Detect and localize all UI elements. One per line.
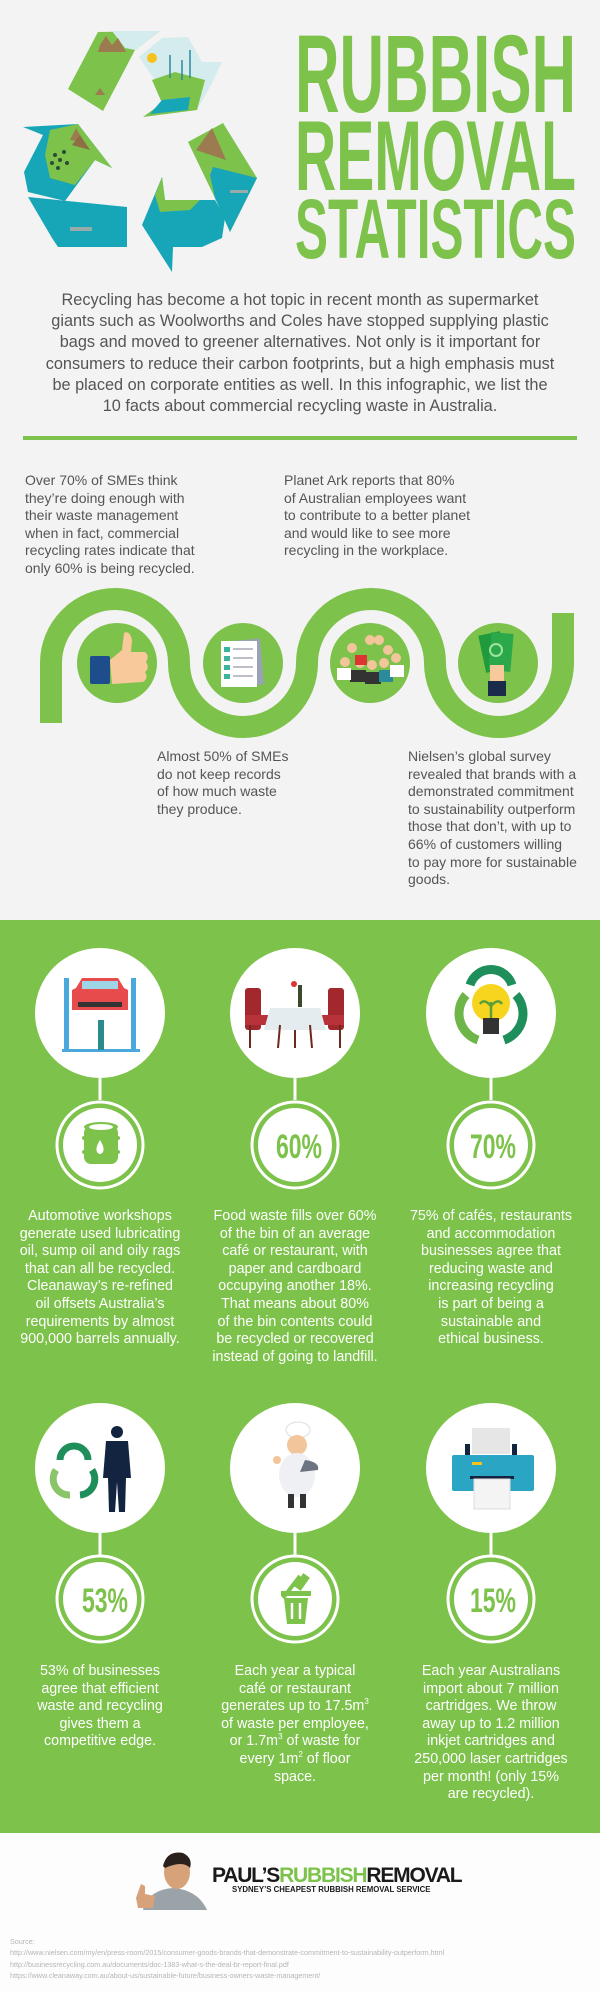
sources: Source: (10, 1937, 35, 1946)
fact: over 70% SMEs: recycling rates indicate that (25, 542, 195, 558)
piece 4: left bottom water band (28, 197, 127, 247)
text: 53% of businesses: agree that efficient (41, 1681, 159, 1697)
text: cartridges: per month! (only 15% (423, 1769, 559, 1785)
text: 53% of businesses (37, 1663, 163, 1749)
text: typical café waste: Each year a typical (235, 1663, 355, 1679)
fact: almost 50% SMEs: of how much waste (157, 783, 277, 799)
fact: Planet Ark: recycling in the workplace. (284, 542, 448, 558)
text: 75% of cafés: ethical business. (438, 1331, 544, 1347)
text: 75% of cafés: is part of being a (438, 1296, 544, 1312)
sources (10, 1937, 444, 1980)
text: automotive workshops: 900,000 barrels annually. (20, 1331, 180, 1347)
sources: http://www.nielsen.com/my/en/press-room/2015/consumer-goods-brands-that-demonstrate-commitment-to-sustainability-outperform.html (10, 1948, 444, 1957)
text: automotive workshops (20, 1208, 180, 1347)
logo: Paul's Rubbish Removal (136, 1852, 462, 1910)
icon: money in hand (458, 623, 538, 703)
fact: Nielsen survey: to pay more for sustainable (408, 854, 577, 870)
fact: over 70% SMEs: only 60% is being recycled. (25, 560, 195, 576)
text: 53% of businesses: competitive edge. (44, 1733, 156, 1749)
text: typical café waste: space. (274, 1769, 316, 1785)
fact: Nielsen survey: goods. (408, 871, 450, 887)
text: typical café waste: generates up to 17.5m3 (221, 1697, 369, 1714)
text: cartridges: Each year Australians (422, 1663, 560, 1679)
sources: http://businessrecycling.com.au/documents/doc-1383-what-s-the-deal-br-report-final.pdf (10, 1960, 289, 1969)
text: cartridges: 250,000 laser cartridges (414, 1751, 568, 1767)
text: food waste: be recycled or recovered (216, 1331, 374, 1347)
fact: Nielsen survey: demonstrated commitment (408, 783, 574, 799)
text: 75% of cafés: businesses agree that (421, 1243, 561, 1259)
stat: 60% and 70%: 70% (470, 1128, 516, 1166)
fact: Nielsen survey (408, 748, 577, 887)
fact: almost 50% SMEs: Almost 50% of SMEs (157, 748, 288, 764)
text: food waste: Food waste fills over 60% (214, 1208, 376, 1224)
text: food waste: café or restaurant, with (222, 1243, 368, 1259)
fact: Planet Ark: and would like to see more (284, 525, 451, 541)
text: cartridges: cartridges. We throw (426, 1698, 556, 1714)
fact: Nielsen survey: to sustainability outperform (408, 801, 575, 817)
fact: Nielsen survey: those that don’t, with up to (408, 818, 571, 834)
text: food waste: paper and cardboard (229, 1261, 361, 1277)
fact: Planet Ark (284, 472, 470, 558)
piece 1: top-left land (68, 31, 160, 111)
text: automotive workshops: Cleanaway’s re-refined (27, 1278, 173, 1294)
title (295, 13, 576, 270)
icon: group of people (330, 623, 410, 703)
piece 2: top-right sky arrow (139, 37, 222, 117)
text: cartridges: inkjet cartridges and (427, 1733, 555, 1749)
stat: 60% and 70%: 60% (276, 1128, 322, 1166)
text: 75% of cafés (410, 1208, 572, 1347)
text: 53% of businesses: gives them a (59, 1716, 141, 1732)
text: 53% of businesses: 53% of businesses (40, 1663, 160, 1679)
text: automotive workshops: that can all be recycled. (25, 1261, 175, 1277)
intro paragraph: be placed on corporate entities as well. In this infographic, we list the (52, 376, 548, 394)
text: cartridges (414, 1663, 568, 1802)
text: automotive workshops: oil offsets Australia’s (35, 1296, 164, 1312)
fact: almost 50% SMEs (157, 748, 288, 817)
text: 53% of businesses: waste and recycling (37, 1698, 163, 1714)
text: 75% of cafés: and accommodation (427, 1226, 555, 1242)
icon: man thumbs up (136, 1852, 207, 1910)
text: food waste: of the bin of an average (220, 1226, 370, 1242)
text: typical café waste (221, 1663, 369, 1785)
text: 75% of cafés: reducing waste and (429, 1261, 553, 1277)
text: food waste: occupying another 18%. (218, 1278, 372, 1294)
text: food waste: instead of going to landfill. (212, 1349, 378, 1365)
text: 75% of cafés: sustainable and (441, 1314, 541, 1330)
intro paragraph: 10 facts about commercial recycling waste in Australia. (103, 397, 497, 415)
intro paragraph: giants such as Woolworths and Coles have stopped supplying plastic (51, 312, 549, 330)
text: 75% of cafés: 75% of cafés, restaurants (410, 1208, 572, 1224)
fact: over 70% SMEs (25, 472, 195, 576)
text: automotive workshops: Automotive workshops (28, 1208, 172, 1224)
intro paragraph: Recycling has become a hot topic in recent month as supermarket (62, 291, 538, 309)
fact: Planet Ark: Planet Ark reports that 80% (284, 472, 454, 488)
fact: over 70% SMEs: when in fact, commercial (25, 525, 179, 541)
fact: almost 50% SMEs: do not keep records (157, 766, 281, 782)
text: 75% of cafés: increasing recycling (428, 1278, 554, 1294)
icon: checklist (203, 623, 283, 703)
tagline: SYDNEY’S CHEAPEST RUBBISH REMOVAL SERVICE (232, 1885, 430, 1894)
piece 3: left upper arrow (23, 124, 112, 201)
text: automotive workshops: generate used lubricating (20, 1226, 180, 1242)
fact: over 70% SMEs: Over 70% of SMEs think (25, 472, 178, 488)
icon: recycle symbol with landscapes (23, 31, 257, 272)
text: typical café waste: café or restaurant (239, 1681, 351, 1697)
text: typical café waste: or 1.7m3 of waste for (230, 1732, 360, 1749)
stat: 53%: 53% (82, 1582, 128, 1620)
fact: almost 50% SMEs: they produce. (157, 801, 242, 817)
fact: Planet Ark: of Australian employees want (284, 490, 466, 506)
text: typical café waste: every 1m2 of floor (240, 1750, 350, 1767)
text: cartridges: are recycled). (448, 1786, 534, 1802)
text: food waste (212, 1208, 378, 1365)
text: cartridges: away up to 1.2 million (422, 1716, 560, 1732)
fact: over 70% SMEs: their waste management (25, 507, 178, 523)
brand name: PAUL’SRUBBISHREMOVAL (212, 1864, 461, 1887)
stat: 15%: 15% (470, 1582, 516, 1620)
fact: Nielsen survey: 66% of customers willing (408, 836, 562, 852)
text: cartridges: import about 7 million (423, 1681, 559, 1697)
text: typical café waste: of waste per employee, (221, 1716, 369, 1732)
icon: thumbs up (77, 623, 157, 703)
text: automotive workshops: oil, sump oil and oily rags (20, 1243, 180, 1259)
piece 5: bottom-right arrow (142, 177, 225, 272)
intro paragraph (46, 291, 554, 415)
text: food waste: That means about 80% (221, 1296, 369, 1312)
wave path with icons (40, 588, 574, 738)
intro paragraph: bags and moved to greener alternatives. Not only is it important for (60, 333, 540, 351)
intro paragraph: consumers to reduce their carbon footprints, but a high emphasis must (46, 355, 554, 373)
fact: Nielsen survey: revealed that brands with a (408, 766, 576, 782)
text: food waste: of the bin contents could (218, 1314, 372, 1330)
piece 6: right land (188, 123, 257, 232)
fact: Planet Ark: to contribute to a better planet (284, 507, 470, 523)
fact: Nielsen survey: Nielsen’s global survey (408, 748, 551, 764)
fact: over 70% SMEs: they’re doing enough with (25, 490, 185, 506)
sources: https://www.cleanaway.com.au/about-us/sustainable-future/business-owners-waste-management/ (10, 1971, 320, 1980)
text: automotive workshops: requirements by almost (26, 1314, 174, 1330)
